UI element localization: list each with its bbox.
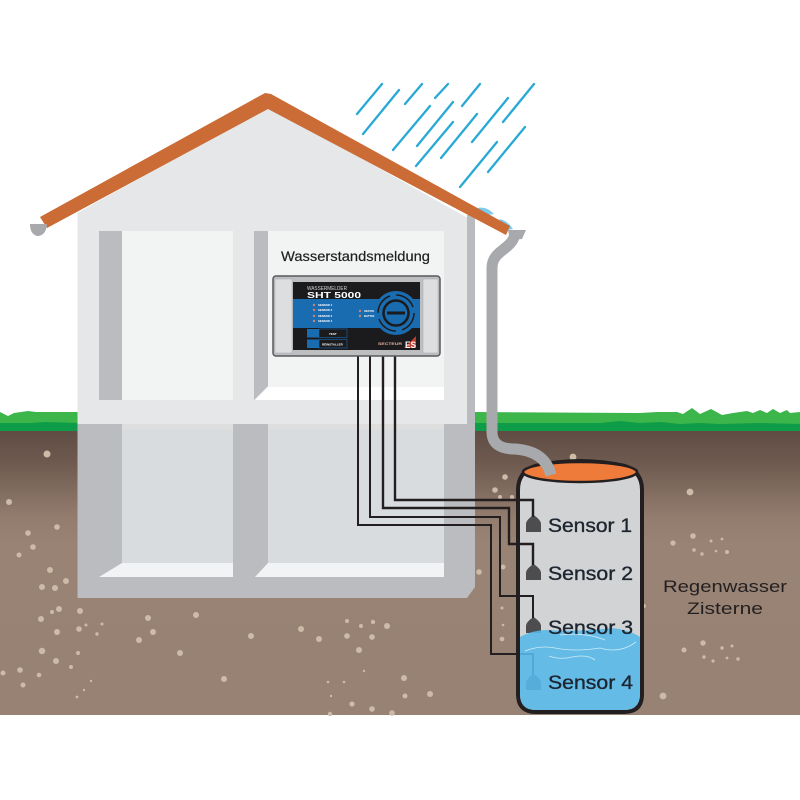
cistern label: Regenwasser	[663, 577, 787, 596]
grass	[0, 408, 800, 431]
wire to sensor 4	[358, 356, 533, 675]
sensor 1 float	[526, 515, 541, 532]
reset button	[307, 340, 347, 348]
downpipe	[492, 230, 551, 475]
test button: TEST	[329, 332, 337, 336]
sensor labels	[548, 516, 633, 694]
lower storey wall	[78, 424, 475, 598]
heading: Wasserstandsmeldung	[281, 248, 430, 264]
upper storey wall	[78, 106, 475, 424]
sensor 2 float	[526, 564, 541, 580]
cistern label: Zisterne	[687, 599, 763, 618]
cistern body	[518, 461, 642, 712]
cistern	[518, 461, 642, 712]
cistern wall front edge	[516, 490, 520, 640]
house	[78, 106, 475, 598]
brand logo	[378, 336, 416, 350]
sensor wires	[358, 356, 533, 675]
water alarm device: SENSOR 2	[318, 308, 333, 312]
sensor labels: Sensor 1	[548, 516, 632, 537]
water in cistern	[518, 628, 642, 710]
water alarm device: SECTEUR	[364, 309, 377, 313]
water ripples	[525, 634, 636, 660]
product name: WASSERMELDER	[307, 286, 347, 292]
water alarm device: SHT 5000	[307, 290, 361, 300]
water alarm device: SENSOR 1	[318, 303, 333, 307]
cistern label	[663, 577, 787, 618]
water alarm device	[273, 276, 440, 356]
device housing	[273, 276, 440, 356]
water splash on roof	[477, 208, 513, 230]
right lower window	[255, 424, 444, 577]
cistern opening	[523, 462, 637, 482]
left lower window	[99, 424, 233, 577]
wire to sensor 2	[383, 356, 533, 565]
soil pebbles	[0, 450, 740, 716]
water alarm device: BATTERIE	[364, 314, 378, 318]
wire to sensor 3	[370, 356, 533, 618]
sensor 4 float	[526, 674, 541, 690]
logo rings	[374, 291, 418, 335]
right upper window	[254, 231, 444, 400]
control panel	[293, 282, 420, 350]
reset button: RÉINSTALLER	[322, 342, 344, 346]
water alarm device: SENSOR 3	[318, 314, 333, 318]
sensor labels: Sensor 2	[548, 564, 633, 585]
roof	[40, 93, 510, 235]
left gutter	[30, 224, 47, 236]
sensor 3 float	[526, 617, 541, 633]
brand logo: SECTEUR	[378, 342, 403, 346]
brand logo: ES	[405, 340, 416, 350]
rain	[357, 84, 534, 187]
ground: soil	[0, 431, 800, 715]
water alarm device: SENSOR 4	[318, 319, 333, 323]
left upper window	[99, 231, 233, 400]
wire to sensor 1	[395, 356, 533, 517]
sensor indicators	[313, 304, 361, 322]
test button	[307, 329, 347, 338]
sensor labels: Sensor 4	[548, 673, 633, 694]
sensor labels: Sensor 3	[548, 618, 633, 639]
